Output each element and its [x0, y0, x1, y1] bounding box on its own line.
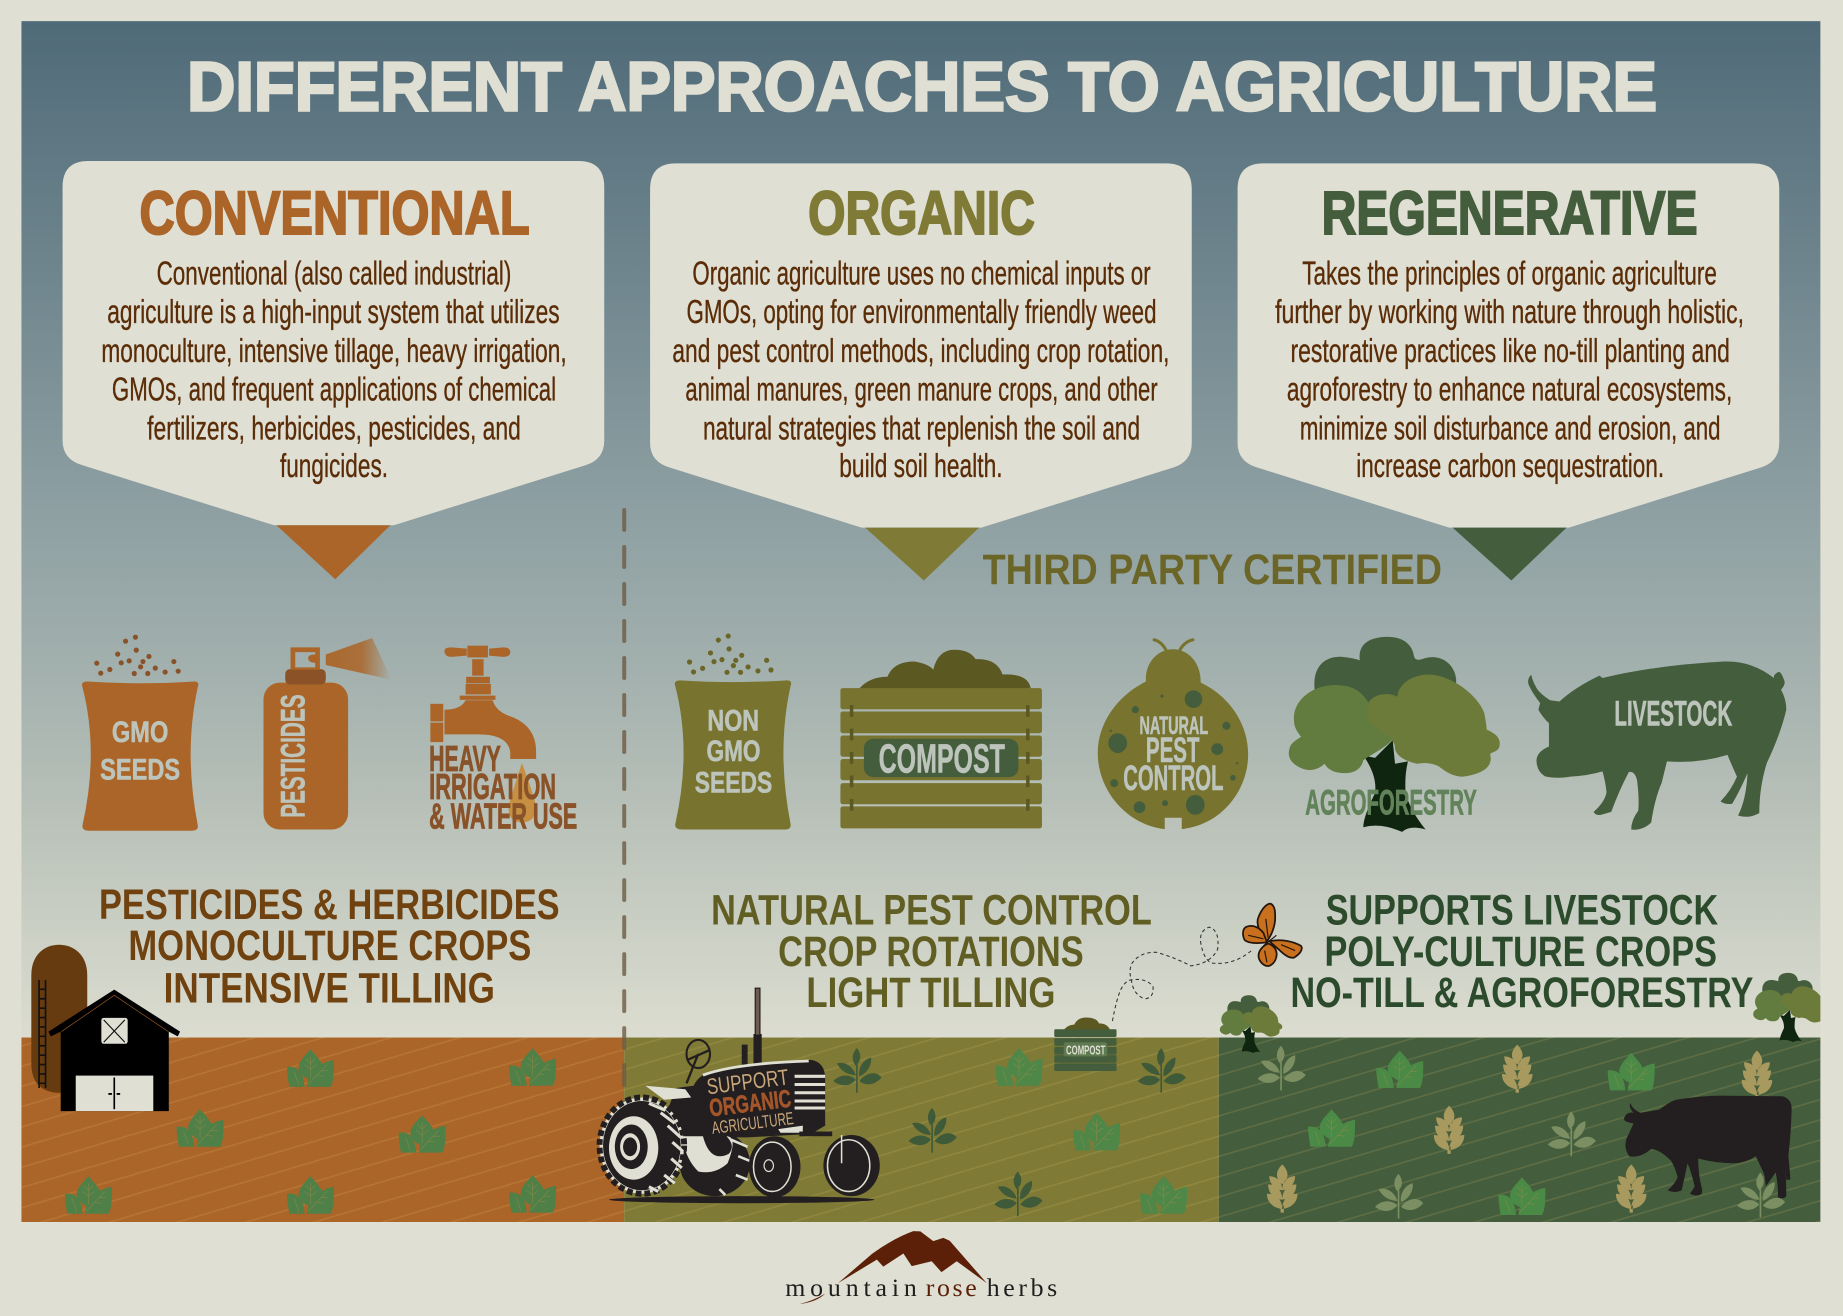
heading: regenerative: REGENERATIVE [1322, 179, 1698, 247]
icon: vintage tractor [600, 988, 880, 1203]
icon: GMO seeds bag [82, 635, 198, 831]
icon: grazing cow [1624, 1096, 1792, 1198]
icon: compost crate [840, 650, 1042, 828]
crops: conventional field [65, 1048, 556, 1214]
description: regenerative: increase carbon sequestration. [1356, 447, 1664, 484]
practices list: conventional [99, 881, 560, 1011]
icon: livestock pig: LIVESTOCK [1614, 695, 1733, 734]
heading: organic: ORGANIC [808, 179, 1035, 247]
small tree right [1753, 973, 1828, 1042]
description: organic: natural strategies that replenish the soil and [703, 409, 1140, 446]
tractor sign text [705, 1064, 795, 1138]
icon: ladybug natural pest control [1098, 640, 1248, 829]
tractor sign text: ORGANIC [708, 1086, 793, 1122]
title: DIFFERENT APPROACHES TO AGRICULTURE [187, 47, 1657, 125]
pointer: conventional [276, 525, 390, 579]
icon: ladybug natural pest control: CONTROL [1123, 759, 1223, 798]
icon: pesticide spray bottle [264, 638, 392, 830]
description: conventional: agriculture is a high-input system that utilizes [107, 293, 560, 330]
description: conventional: GMOs, and frequent applications of chemical [112, 371, 556, 408]
crops: organic field [833, 1048, 1187, 1216]
description: organic: build soil health. [839, 447, 1003, 484]
icon: livestock pig [1528, 661, 1786, 830]
practices list: conventional: MONOCULTURE CROPS [128, 922, 531, 969]
practices list: organic: CROP ROTATIONS [778, 928, 1084, 975]
crops: regenerative field [1258, 1045, 1772, 1218]
icon: ladybug natural pest control: NATURAL [1139, 713, 1208, 740]
panel: regenerative [1238, 163, 1779, 580]
pointer: organic [865, 528, 979, 580]
description: conventional: monoculture, intensive tillage, heavy irrigation, [101, 332, 567, 369]
tractor sign text: SUPPORT [705, 1064, 790, 1099]
description: organic [672, 254, 1169, 484]
practices list: conventional: INTENSIVE TILLING [164, 964, 495, 1011]
small compost crate on field [1054, 1018, 1117, 1071]
icon: monarch butterfly [1243, 904, 1302, 966]
practices list: regenerative: SUPPORTS LIVESTOCK [1326, 887, 1719, 934]
butterfly flight path [1112, 927, 1253, 1021]
icon: pesticide spray bottle: PESTICIDES [275, 694, 313, 818]
heading: conventional: CONVENTIONAL [140, 179, 530, 247]
farmland ground strips [21, 1038, 1820, 1222]
description: organic: Organic agriculture uses no chemical inputs or [692, 254, 1151, 291]
description: organic: GMOs, opting for environmentally friendly weed [687, 293, 1156, 330]
sky gradient panel [21, 21, 1820, 1039]
panel: organic [650, 163, 1192, 580]
practices list: regenerative: POLY-CULTURE CROPS [1325, 928, 1717, 975]
logo: mountain rose herbs [785, 1231, 1057, 1304]
tractor sign text: AGRICULTURE [711, 1108, 795, 1138]
sprig over cow [1737, 1173, 1785, 1217]
practices list: organic: LIGHT TILLING [806, 969, 1055, 1016]
icon: faucet with water drop: HEAVY [429, 738, 501, 779]
icon: non GMO seeds bag [675, 633, 791, 830]
description: organic: and pest control methods, including crop rotation, [672, 332, 1169, 369]
description: regenerative [1275, 254, 1744, 484]
icon: compost crate: COMPOST [879, 736, 1005, 782]
icon: agroforestry tree: AGROFORESTRY [1305, 783, 1477, 822]
practices list: organic: NATURAL PEST CONTROL [711, 887, 1152, 934]
practices list: regenerative [1290, 887, 1753, 1016]
tractor wheels [600, 1097, 880, 1197]
icon: GMO seeds bag: SEEDS [100, 754, 180, 787]
description: conventional [101, 254, 567, 484]
logo: mountain rose herbs: mountain [785, 1273, 917, 1302]
icon: non GMO seeds bag: SEEDS [695, 767, 772, 800]
panel: conventional [63, 161, 604, 579]
icon: faucet with water drop: IRRIGATION [429, 766, 556, 807]
icon: ladybug natural pest control: PEST [1146, 731, 1200, 770]
icon: non GMO seeds bag: GMO [706, 735, 761, 768]
icon: silo and barn [31, 945, 180, 1111]
icon: GMO seeds bag: GMO [112, 716, 168, 749]
description: conventional: fungicides. [280, 447, 388, 484]
logo: mountain rose herbs: herbs [987, 1273, 1057, 1302]
pointer: regenerative [1453, 528, 1567, 580]
third party certified label: THIRD PARTY CERTIFIED [983, 546, 1442, 593]
description: conventional: Conventional (also called industrial) [157, 254, 511, 291]
practices list: organic [711, 887, 1152, 1016]
small compost crate on field: COMPOST [1066, 1043, 1105, 1058]
logo: mountain rose herbs: rose [926, 1273, 977, 1302]
description: organic: animal manures, green manure crops, and other [685, 371, 1158, 408]
tractor rear inner tyre [679, 1130, 750, 1196]
practices list: conventional: PESTICIDES & HERBICIDES [99, 881, 560, 928]
icon: faucet with water drop: & WATER USE [429, 795, 577, 836]
description: conventional: fertilizers, herbicides, pesticides, and [147, 409, 521, 446]
icon: non GMO seeds bag: NON [707, 704, 759, 737]
icon: agroforestry tree [1289, 637, 1500, 832]
icon: faucet with water drop [429, 646, 577, 836]
small tree left [1220, 995, 1282, 1053]
